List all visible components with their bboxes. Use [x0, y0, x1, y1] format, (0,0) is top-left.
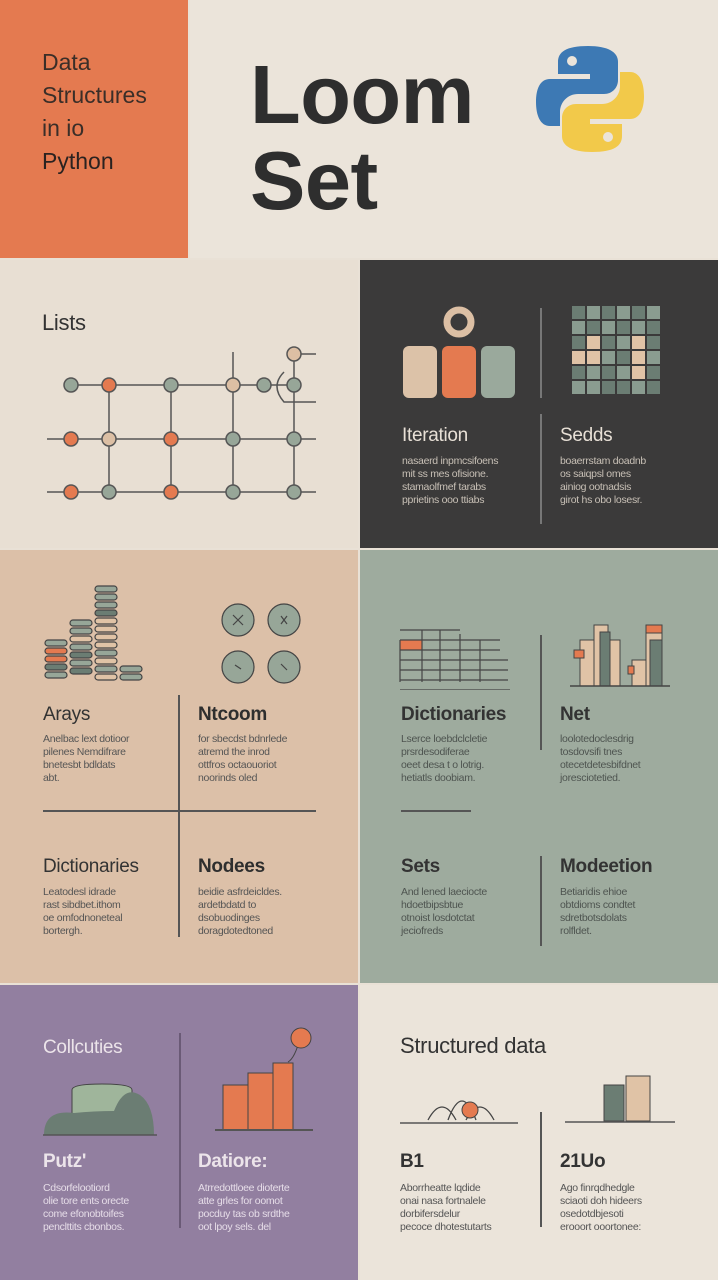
chart: list network: [47, 346, 316, 500]
text: sets: hdoetbipsbtue: [401, 899, 463, 911]
panel: sage: [360, 550, 718, 983]
heading: Lists: Lists: [42, 310, 86, 335]
text: sets: jeciofreds: [401, 925, 443, 937]
text: dictionaries: [43, 886, 122, 937]
text: net: tosdovsifi tnes: [560, 746, 622, 758]
text: modeetion: rolfldet.: [560, 925, 592, 937]
text: nodees: beidie asfrdeicldes.: [198, 886, 282, 898]
heading: Nodees: Nodees: [198, 856, 265, 877]
text: sedds: boaerrstam doadnb: [560, 455, 646, 467]
heading: Sets: Sets: [401, 856, 440, 877]
chart: two bars: [565, 1076, 675, 1123]
text: b1: onai nasa fortnalele: [400, 1195, 486, 1207]
icon: arcs with ball: [400, 1100, 518, 1124]
subtitle: [42, 49, 147, 174]
subtitle: in io: [42, 115, 84, 141]
text: net: [560, 733, 641, 784]
text: sets: And lened laeciocte: [401, 886, 487, 898]
heading: Dictionaries: Dictionaries: [401, 704, 506, 725]
text: iteration: stamaolfmef tarabs: [402, 481, 486, 493]
text: modeetion: Betiaridis ehioe: [560, 886, 627, 898]
icon: grid: [572, 306, 660, 394]
heading: Structured data: Structured data: [400, 1033, 546, 1058]
text: 21uo: osedotdbjesoti: [560, 1208, 624, 1220]
text: modeetion: [560, 886, 636, 937]
text: datiore: Atrredottloee dioterte: [198, 1182, 289, 1194]
heading: Datiore: Datiore:: [198, 1151, 267, 1172]
text: ntcoom: noorinds oled: [198, 772, 257, 784]
text: datiore: pocduy tas ob srdthe: [198, 1208, 289, 1220]
panel: peach: [0, 550, 358, 983]
text: dictionaries: Leatodesl idrade: [43, 886, 116, 898]
title: [250, 48, 474, 227]
panel: structured data: [360, 985, 718, 1280]
text: ntcoom: atremd the inrod: [198, 746, 270, 758]
icon: stacked bars: [44, 585, 143, 681]
icon: four circles: [221, 603, 301, 684]
heading: Arays: Arays: [43, 704, 90, 725]
text: arays: pilenes Nemdifrare: [43, 746, 126, 758]
subtitle: Structures: [42, 82, 147, 108]
text: net: joresciotetied.: [560, 772, 620, 784]
text: datiore: oot lpoy sels. del: [198, 1221, 271, 1233]
heading: Net: Net: [560, 704, 590, 725]
panel: purple: [0, 985, 358, 1280]
text: arays: bnetesbt bdldats: [43, 759, 115, 771]
text: putz: come efonobtoifes: [43, 1208, 124, 1220]
text: nodees: [198, 886, 282, 937]
chart: column bars: [570, 624, 670, 687]
text: ntcoom: for sbecdst bdnrlede: [198, 733, 287, 745]
text: iteration: [402, 455, 498, 506]
text: net: otecetdetesbifdnet: [560, 759, 640, 771]
panel: dark: [360, 260, 718, 548]
heading: Dictionaries: Dictionaries: [43, 856, 139, 877]
text: dictionaries sage: [401, 733, 487, 784]
text: dictionaries sage: oeet desa t o lotrig.: [401, 759, 484, 771]
heading: Modeetion: Modeetion: [560, 856, 652, 877]
text: sets: otnoist losdotctat: [401, 912, 474, 924]
text: net: loolotedoclesdrig: [560, 733, 634, 745]
heading: Putz: Putz': [43, 1151, 86, 1172]
text: arays: Anelbac lext dotioor: [43, 733, 129, 745]
text: dictionaries sage: Lserce loebdclcletie: [401, 733, 487, 745]
heading: 21Uo: 21Uo: [560, 1151, 605, 1172]
chart: orange bars with balloon: [215, 1028, 313, 1131]
text: iteration: nasaerd inpmcsifoens: [402, 455, 498, 467]
text: putz: penclttits cbonbos.: [43, 1221, 124, 1233]
title: Set: [250, 134, 378, 227]
text: dictionaries sage: hetiatls doobiam.: [401, 772, 475, 784]
text: dictionaries: oe omfodnoneteal: [43, 912, 122, 924]
chart: grid table: [399, 629, 510, 690]
heading: Iteration: Iteration: [402, 425, 468, 446]
text: 21uo: erooort ooortonee:: [560, 1221, 641, 1233]
text: sedds: girot hs obo losesr.: [560, 494, 642, 506]
text: iteration: mit ss mes ofisione.: [402, 468, 488, 480]
icon: hill shape: [43, 1084, 157, 1136]
text: datiore: atte grles for oomot: [198, 1195, 282, 1207]
text: sedds: ainiog ootnadsis: [560, 481, 631, 493]
panel: header orange: [0, 0, 188, 258]
text: b1: dorbifersdelur: [400, 1208, 460, 1220]
text: b1: Aborrheatte lqdide: [400, 1182, 480, 1194]
heading: B1: B1: [400, 1151, 424, 1172]
heading: Collcuties: Collcuties: [43, 1037, 122, 1058]
text: sedds: os saiqpsl omes: [560, 468, 631, 480]
text: modeetion: sdretbotsdolats: [560, 912, 627, 924]
text: datiore: [198, 1182, 290, 1233]
title: Loom: [250, 48, 474, 141]
text: sedds: [560, 455, 646, 506]
icon: iteration blocks: [403, 306, 515, 398]
text: 21uo: Ago finrqdhedgle: [560, 1182, 635, 1194]
heading: Ntcoom: Ntcoom: [198, 704, 267, 725]
text: b1: [400, 1182, 492, 1233]
text: 21uo: sciaoti doh hideers: [560, 1195, 642, 1207]
text: ntcoom: ottfros octaouoriot: [198, 759, 276, 771]
text: b1: pecoce dhotestutarts: [400, 1221, 491, 1233]
text: dictionaries sage: prsrdesodiferae: [401, 746, 469, 758]
text: dictionaries: rast sibdbet.ithom: [43, 899, 120, 911]
text: arays: [43, 733, 130, 784]
text: nodees: dsobuodinges: [198, 912, 260, 924]
icon: python logo: [536, 46, 644, 152]
text: nodees: doragdotedtoned: [198, 925, 273, 937]
subtitle: Python: [42, 148, 114, 174]
subtitle: Data: [42, 49, 91, 75]
panel: header cream: [190, 0, 718, 258]
text: arays: abt.: [43, 772, 59, 784]
text: modeetion: obtdioms condtet: [560, 899, 635, 911]
text: 21uo: [560, 1182, 642, 1233]
text: putz: [43, 1182, 129, 1233]
text: putz: olie tore ents orecte: [43, 1195, 129, 1207]
text: putz: Cdsorfelootiord: [43, 1182, 110, 1194]
heading: Sedds: Sedds: [560, 425, 612, 446]
text: ntcoom: [198, 733, 287, 784]
text: nodees: ardetbdatd to: [198, 899, 256, 911]
panel: lists: [0, 260, 358, 548]
text: iteration: pprietins ooo ttiabs: [402, 494, 484, 506]
text: dictionaries: bortergh.: [43, 925, 82, 937]
text: sets: [400, 886, 487, 937]
